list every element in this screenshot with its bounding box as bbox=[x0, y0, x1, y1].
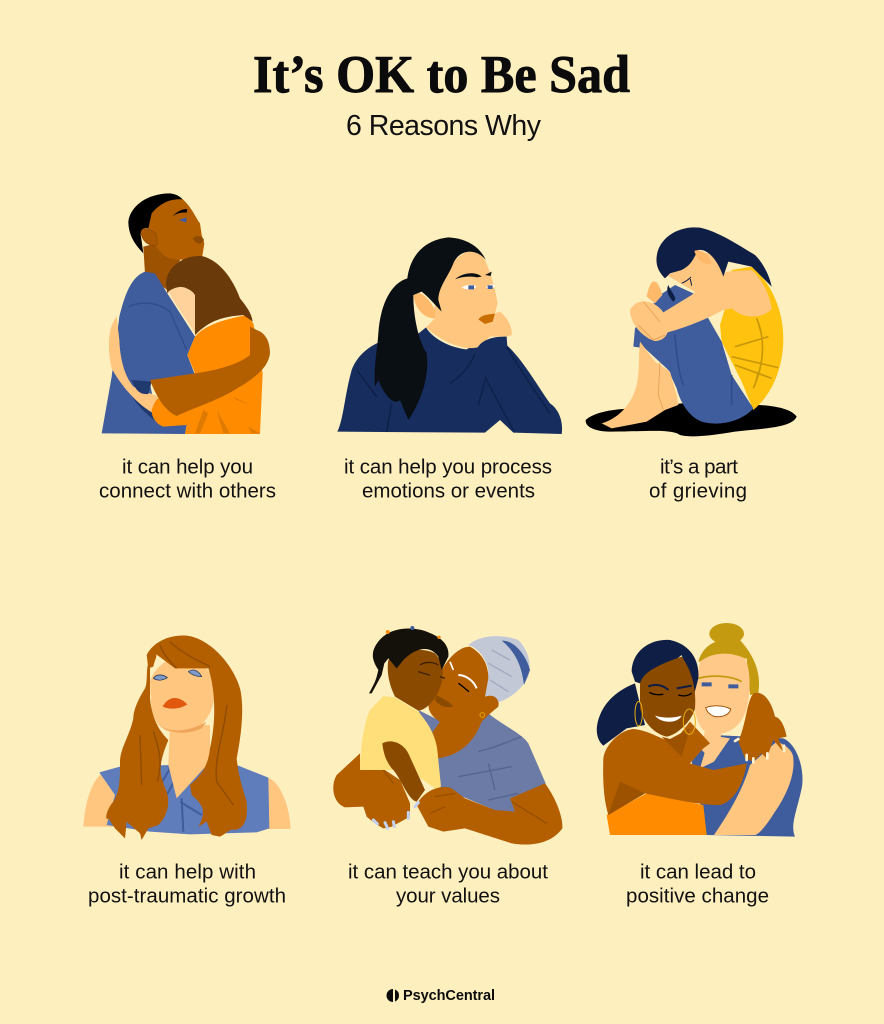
title: It’s OK to Be Sad bbox=[253, 46, 630, 104]
panel: connect with others bbox=[99, 193, 276, 503]
caption: it can help you bbox=[122, 456, 253, 478]
caption: your values bbox=[396, 884, 500, 908]
illustration: woman with long auburn hair looking up bbox=[83, 636, 291, 840]
illustration: grandmother kissing child bbox=[333, 626, 562, 845]
panel: post-traumatic growth bbox=[83, 636, 291, 908]
illustration: man and girl hugging bbox=[102, 193, 270, 434]
panel: part of grieving bbox=[586, 227, 797, 503]
caption: it can help you process bbox=[344, 456, 552, 478]
caption: it can teach you about bbox=[348, 860, 548, 884]
caption: it can lead to bbox=[640, 860, 756, 884]
caption: of grieving bbox=[649, 480, 747, 502]
caption: emotions or events bbox=[362, 480, 535, 502]
caption: it can help with bbox=[119, 860, 256, 884]
caption: post-traumatic growth bbox=[88, 884, 286, 908]
wordmark: PsychCentral bbox=[403, 988, 495, 1004]
panel: positive change bbox=[597, 623, 803, 908]
subtitle: 6 Reasons Why bbox=[346, 110, 542, 142]
panel: teach about values bbox=[333, 626, 562, 908]
logo: PsychCentral bbox=[386, 988, 495, 1004]
illustration: woman with ponytail resting chin on hand bbox=[337, 237, 562, 434]
caption: positive change bbox=[626, 884, 769, 908]
panel: process emotions or events bbox=[337, 237, 562, 502]
illustration: woman sitting hugging knees bbox=[586, 227, 797, 436]
illustration: two friends hugging and smiling bbox=[597, 623, 803, 837]
icon: half circle mark bbox=[386, 989, 399, 1002]
caption: it’s a part bbox=[660, 456, 738, 478]
caption: connect with others bbox=[99, 480, 276, 502]
